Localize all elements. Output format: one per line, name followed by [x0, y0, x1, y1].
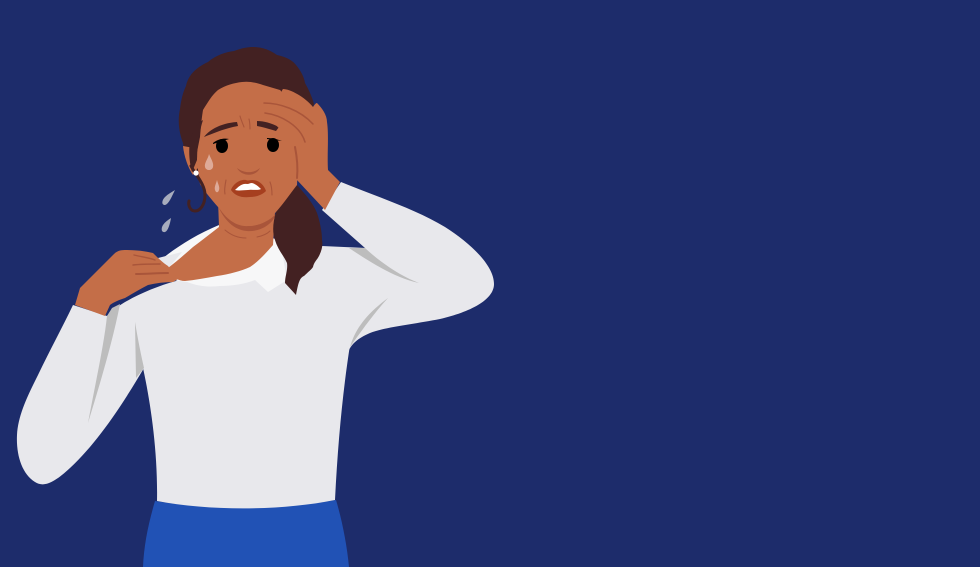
nose	[237, 168, 260, 175]
collar	[158, 225, 287, 292]
brow wrinkles	[240, 116, 250, 129]
skirt	[143, 500, 349, 567]
sweater torso	[107, 246, 368, 508]
right hand on forehead	[263, 89, 340, 210]
neck and chest	[168, 195, 276, 281]
face	[197, 82, 300, 226]
woman figure	[17, 47, 494, 567]
eyes	[213, 138, 282, 153]
neck shadow and creases	[218, 206, 276, 238]
finger lines	[133, 255, 168, 274]
left hand on collar	[75, 250, 178, 316]
side hair strand	[189, 120, 203, 172]
left sleeve	[17, 305, 144, 484]
mouth	[231, 180, 266, 197]
curl and earring	[189, 166, 205, 211]
cheek wrinkles	[225, 180, 272, 195]
ponytail	[273, 185, 322, 295]
eyebrows	[204, 121, 279, 137]
tears on face	[205, 154, 219, 192]
sweat drops	[162, 190, 175, 232]
hair back	[179, 47, 314, 172]
ear	[183, 146, 200, 175]
right sleeve	[322, 182, 494, 353]
sleeve shadows	[88, 248, 419, 423]
collar underside	[158, 252, 182, 270]
finger lines	[264, 103, 313, 178]
